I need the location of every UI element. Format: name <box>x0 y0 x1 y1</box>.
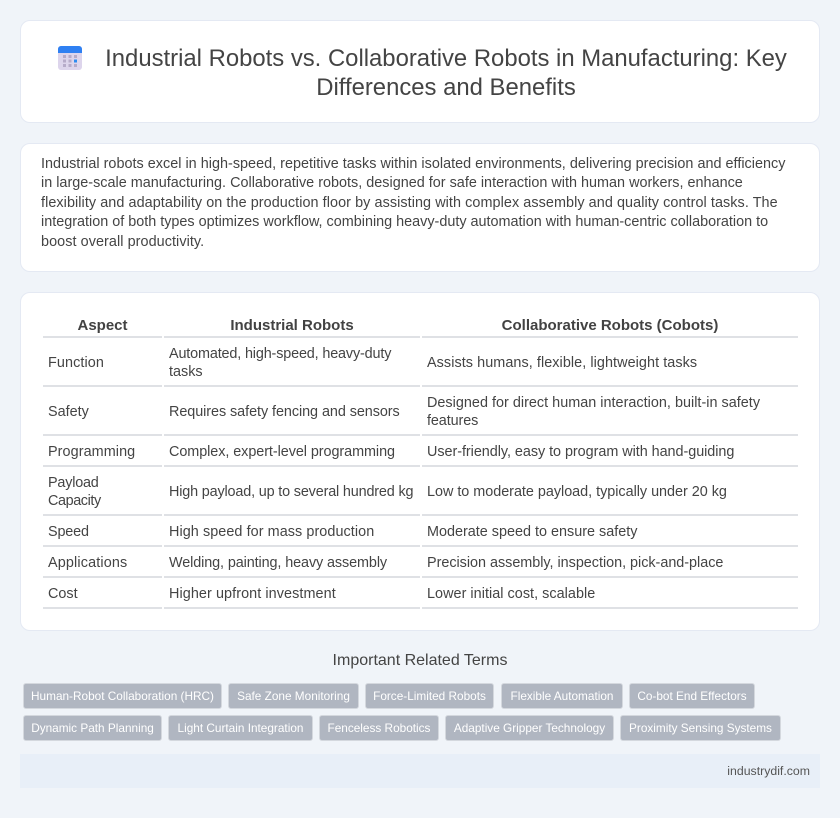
row: Function: Function <box>48 355 104 371</box>
row: Cost: Cost <box>48 586 78 602</box>
row: Function <box>48 346 697 380</box>
tag <box>23 683 222 709</box>
row: Cost: Higher upfront investment <box>169 586 336 602</box>
row: Speed: Moderate speed to ensure safety <box>427 524 637 540</box>
tag <box>168 715 313 741</box>
row: Applications: Welding, painting, heavy assembly <box>169 555 387 571</box>
intro text: Industrial robots excel in high-speed, repetitive tasks within isolated environments, delivering precision and efficiency <box>41 156 785 172</box>
panel: introduction card <box>20 143 820 272</box>
row: Payload Capacity <box>48 474 727 508</box>
row: Speed: Speed <box>48 524 89 540</box>
table header: Collaborative Robots (Cobots) <box>502 316 718 334</box>
table header: Aspect <box>77 316 128 334</box>
tag: Light Curtain Integration <box>178 721 303 735</box>
row: Payload Capacity: Low to moderate payload, typically under 20 kg <box>427 484 727 500</box>
row: Function: tasks <box>169 364 203 380</box>
row: Function: Automated, high-speed, heavy-duty <box>169 346 391 362</box>
footer bar <box>20 754 820 788</box>
row: Payload Capacity: High payload, up to several hundred kg <box>169 484 413 500</box>
row: Cost: Lower initial cost, scalable <box>427 586 595 602</box>
row: Applications <box>48 555 723 571</box>
row: Payload Capacity: Capacity <box>48 492 101 508</box>
heading: related terms: Important Related Terms <box>333 652 507 669</box>
tag: Adaptive Gripper Technology <box>454 721 605 735</box>
tag: Human-Robot Collaboration (HRC) <box>31 689 214 703</box>
tag <box>319 715 439 741</box>
tag: Force-Limited Robots <box>373 689 486 703</box>
row: Safety: features <box>427 412 478 428</box>
table header: Industrial Robots <box>230 316 354 334</box>
row: Safety <box>48 394 760 428</box>
tag: Safe Zone Monitoring <box>237 689 350 703</box>
row: Speed: High speed for mass production <box>169 524 374 540</box>
intro text: boost overall productivity. <box>41 234 204 250</box>
row: Applications: Precision assembly, inspection, pick-and-place <box>427 555 723 571</box>
tag <box>365 683 494 709</box>
tag <box>501 683 623 709</box>
intro text: integration of both types optimizes workflow, combining heavy-duty automation with human-centric collaboration to <box>41 214 768 230</box>
row: Safety: Safety <box>48 404 89 420</box>
tag <box>629 683 755 709</box>
row: Applications: Applications <box>48 555 127 571</box>
row: Safety: Designed for direct human interaction, built-in safety <box>427 394 760 410</box>
panel: comparison table card <box>20 292 820 631</box>
row: Programming: Programming <box>48 444 135 460</box>
tag: Dynamic Path Planning <box>31 721 154 735</box>
title <box>105 45 787 100</box>
tag <box>620 715 781 741</box>
row: Function: Assists humans, flexible, lightweight tasks <box>427 355 697 371</box>
tag <box>228 683 359 709</box>
comparison table <box>43 316 798 609</box>
title: Industrial Robots vs. Collaborative Robots in Manufacturing: Key <box>105 45 787 72</box>
intro text: flexibility and adaptability on the production floor by assisting with complex assembly and quality control tasks. The <box>41 194 778 210</box>
row: Programming: Complex, expert-level programming <box>169 444 395 460</box>
tag: Co-bot End Effectors <box>637 689 747 703</box>
row: Speed <box>48 524 638 540</box>
row: Cost <box>48 586 595 602</box>
tag: Flexible Automation <box>511 689 613 703</box>
row: Programming: User-friendly, easy to program with hand-guiding <box>427 444 734 460</box>
intro text <box>41 156 786 250</box>
intro text: in large-scale manufacturing. Collaborative robots, designed for safe interaction with human workers, enhance <box>41 175 743 191</box>
tag <box>445 715 614 741</box>
title: Differences and Benefits <box>316 74 576 100</box>
tag <box>23 715 162 741</box>
tag: Fenceless Robotics <box>328 721 430 735</box>
row: Payload Capacity: Payload <box>48 474 99 490</box>
panel: title card <box>20 20 820 123</box>
row: Programming <box>48 444 734 460</box>
row: Safety: Requires safety fencing and sensors <box>169 404 400 420</box>
icon: calendar <box>58 46 82 70</box>
table header <box>77 316 718 334</box>
related terms tags <box>23 683 781 741</box>
footer source text: industrydif.com <box>727 764 810 778</box>
tag: Proximity Sensing Systems <box>629 721 772 735</box>
